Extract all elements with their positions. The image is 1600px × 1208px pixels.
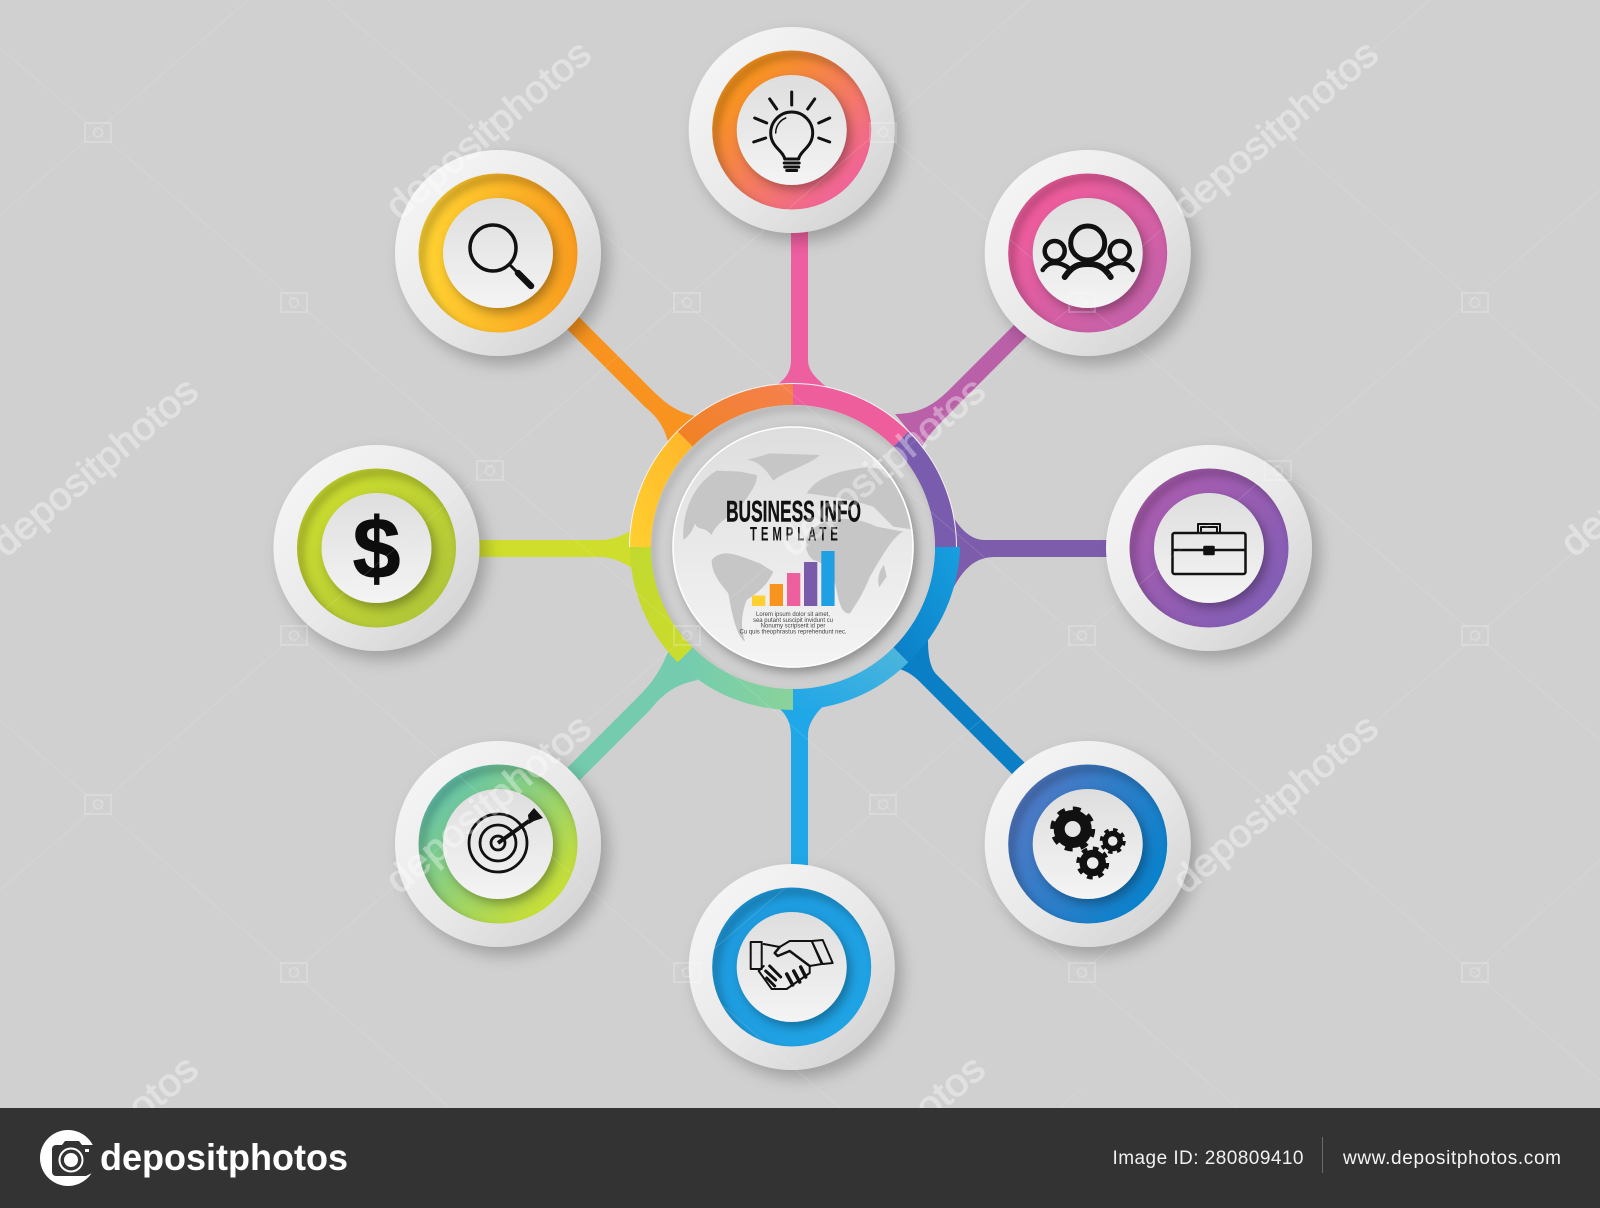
connector: top right magenta xyxy=(895,303,1048,447)
body text: sea putant suscipit invidunt cu xyxy=(753,618,833,624)
image id: Image ID: 280809410 xyxy=(1112,1148,1304,1169)
watermark overlay: depositphotos xyxy=(378,32,599,228)
world map xyxy=(683,453,917,642)
watermark overlay: depositphotos xyxy=(378,706,599,902)
connector: right purple xyxy=(940,495,1115,610)
connector: bottom light blue xyxy=(776,700,830,875)
node: partnership xyxy=(689,864,895,1070)
footer bar xyxy=(0,1108,1600,1208)
icon: dollar sign: $ xyxy=(353,501,400,597)
icon: briefcase xyxy=(1172,524,1246,574)
icon: handshake xyxy=(751,940,833,989)
node: business xyxy=(1106,445,1312,651)
connector: lower right blue xyxy=(885,640,1030,780)
divider xyxy=(1322,1137,1323,1173)
node: team xyxy=(985,150,1191,356)
node: search xyxy=(395,150,601,356)
node: finance xyxy=(274,445,480,651)
subtitle: TEMPLATE xyxy=(750,525,842,545)
node: goals xyxy=(395,741,601,947)
central hub ring xyxy=(629,383,960,710)
icon: magnifier xyxy=(470,225,531,286)
node: settings xyxy=(985,741,1191,947)
body text: Lorem ipsum dolor sit amet, xyxy=(756,612,830,618)
title: BUSINESS INFO xyxy=(726,496,861,528)
node: idea xyxy=(689,27,895,233)
connector: lower left mint xyxy=(560,652,698,790)
watermark overlay: depositphotos xyxy=(1165,706,1386,902)
icon: people xyxy=(1043,226,1133,277)
body text xyxy=(739,612,847,636)
watermark overlay: depositphotos xyxy=(772,369,993,565)
bar chart xyxy=(752,551,835,606)
connector: top pink xyxy=(776,225,830,390)
footer logo icon xyxy=(40,1130,96,1186)
watermark overlay: depositphotos xyxy=(1165,32,1386,228)
body text: Nonumy scripserit id per xyxy=(761,624,825,630)
icon: target xyxy=(469,808,543,872)
website url: www.depositphotos.com xyxy=(1342,1148,1561,1169)
footer logo text: depositphotos xyxy=(100,1137,348,1178)
icon: gears xyxy=(1053,810,1124,877)
icon: light bulb xyxy=(754,92,830,170)
central disc xyxy=(673,427,917,667)
body text: Cu quis theophrastus reprehendunt nec. xyxy=(739,630,847,636)
connector: upper left orange xyxy=(530,278,695,442)
connector: left lime xyxy=(470,530,632,568)
